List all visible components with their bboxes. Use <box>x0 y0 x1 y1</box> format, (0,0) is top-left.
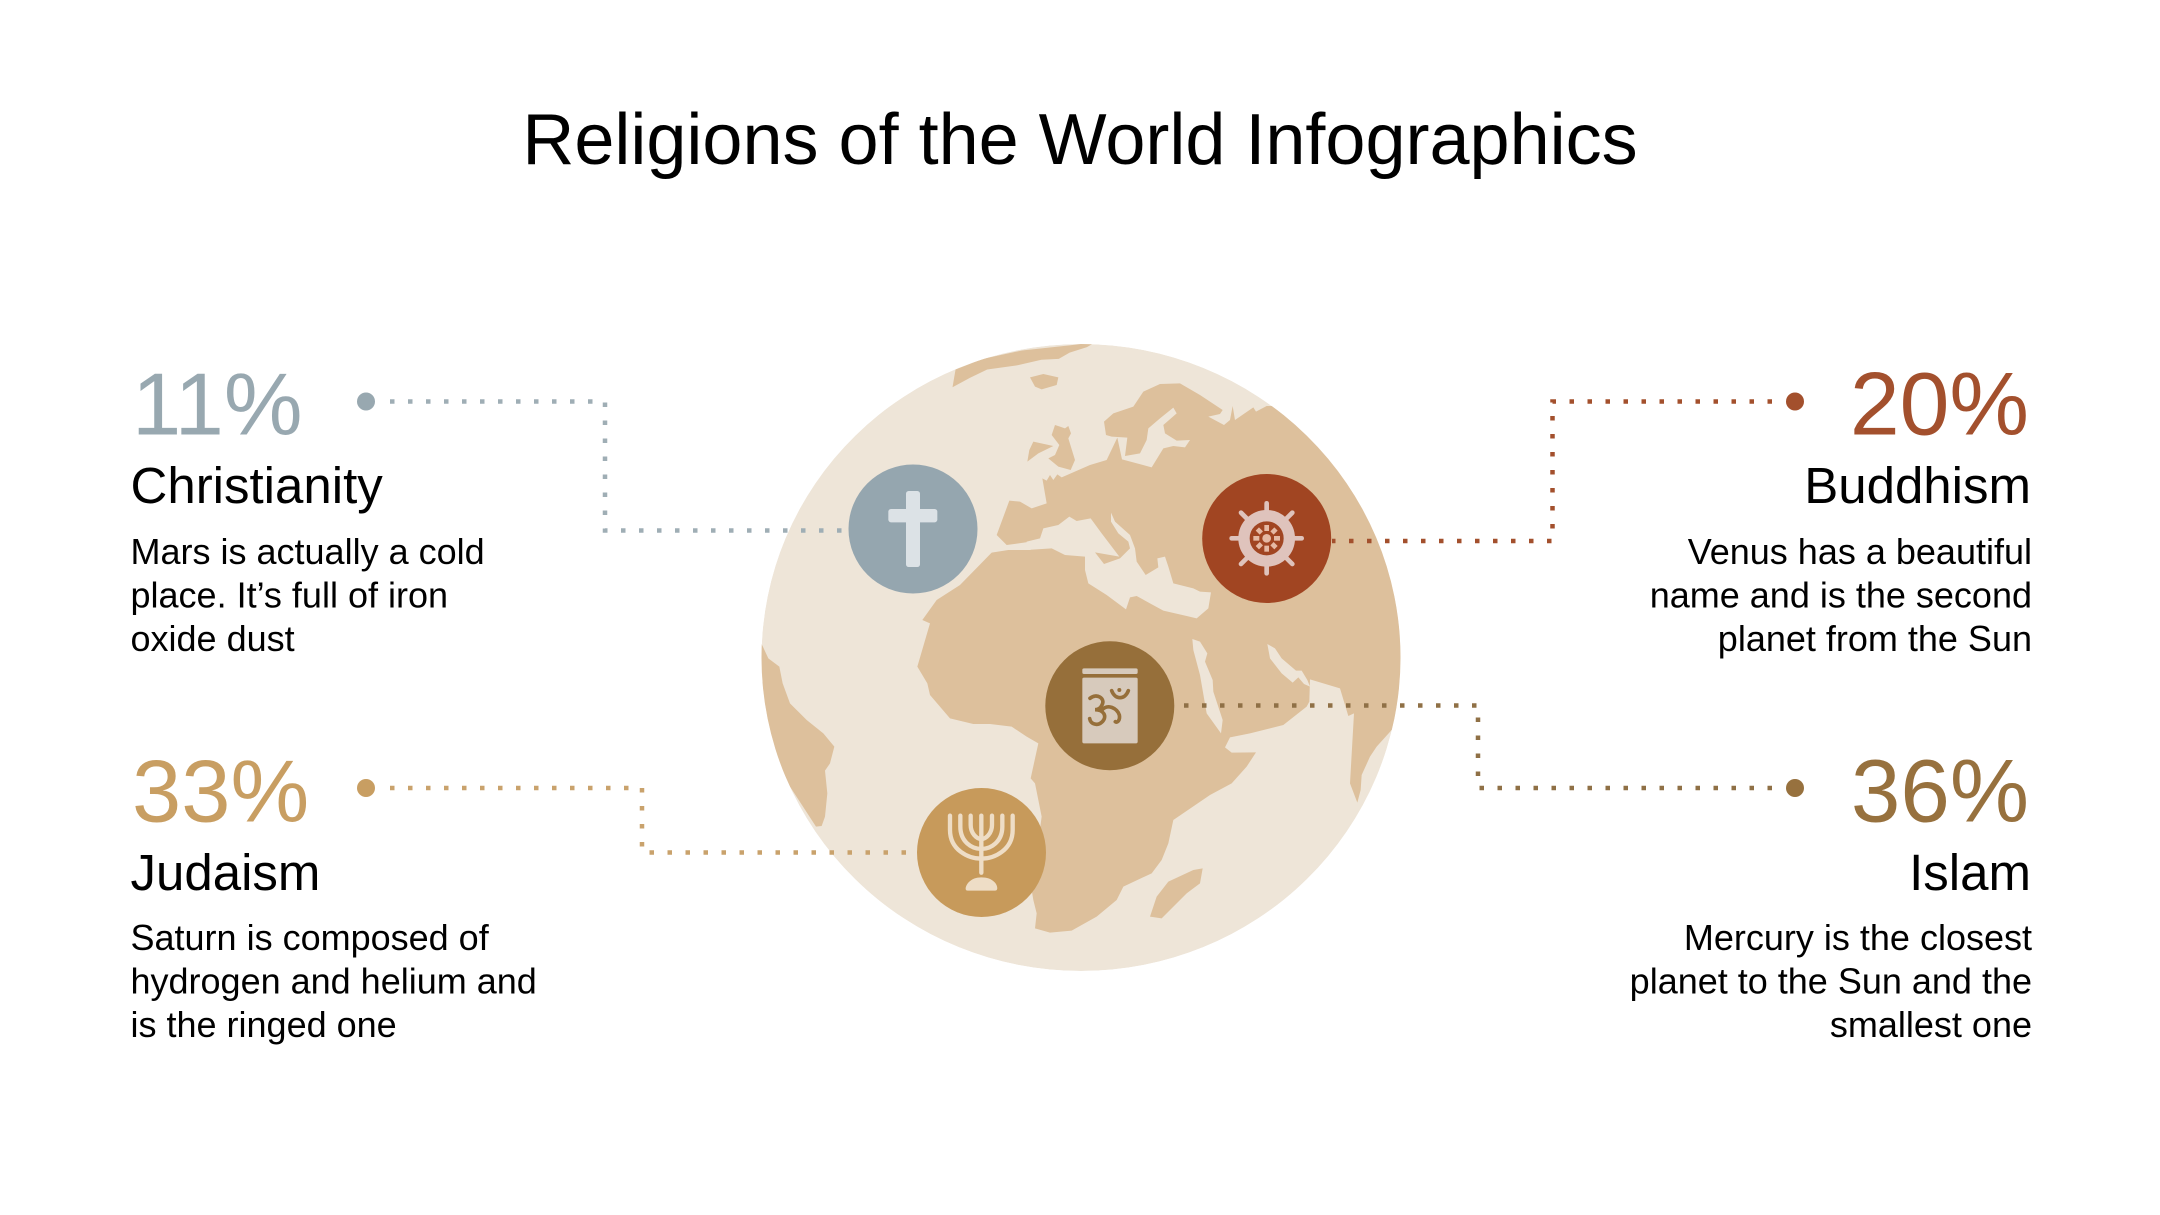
block: Islam <box>1630 740 2032 1045</box>
description: Christianity: Mars is actually a cold <box>130 531 485 572</box>
description: Buddhism: Venus has a beautiful <box>1688 531 2032 572</box>
description: Christianity: place. It’s full of iron <box>130 574 448 616</box>
block: Buddhism <box>1650 354 2032 659</box>
title: Religions of the World Infographics <box>522 100 1638 180</box>
description: Buddhism: planet from the Sun <box>1718 618 2032 659</box>
connector: Buddhism <box>1332 392 1804 541</box>
block: Christianity <box>130 354 485 659</box>
icon: Buddhism dharma wheel <box>1202 474 1331 603</box>
description: Islam: planet to the Sun and the <box>1630 960 2032 1002</box>
percentage: 33%: 33% <box>132 742 309 840</box>
connector: Islam <box>1184 706 1804 797</box>
description: Judaism: hydrogen and helium and <box>130 960 537 1002</box>
icon: Christianity cross <box>848 464 978 594</box>
icon: Judaism menorah <box>917 788 1046 917</box>
heading: Buddhism: Buddhism <box>1804 457 2031 514</box>
globe <box>753 342 1407 971</box>
description: Judaism: Saturn is composed of <box>130 917 490 958</box>
percentage: 36%: 36% <box>1851 740 2029 840</box>
icon: Islam book <box>1045 641 1174 770</box>
description: Christianity: oxide dust <box>130 618 295 659</box>
connector: Judaism <box>357 779 908 852</box>
percentage: 11%: 11% <box>132 354 303 454</box>
heading: Islam: Islam <box>1909 844 2031 901</box>
heading: Judaism: Judaism <box>130 844 320 901</box>
description: Buddhism: name and is the second <box>1650 574 2032 616</box>
percentage: 20%: 20% <box>1850 354 2029 454</box>
heading: Christianity: Christianity <box>130 457 383 514</box>
connector: Christianity <box>357 392 845 530</box>
description: Islam: Mercury is the closest <box>1684 917 2032 958</box>
description: Judaism: is the ringed one <box>130 1004 397 1045</box>
description: Islam: smallest one <box>1830 1004 2032 1045</box>
block: Judaism <box>130 742 537 1045</box>
